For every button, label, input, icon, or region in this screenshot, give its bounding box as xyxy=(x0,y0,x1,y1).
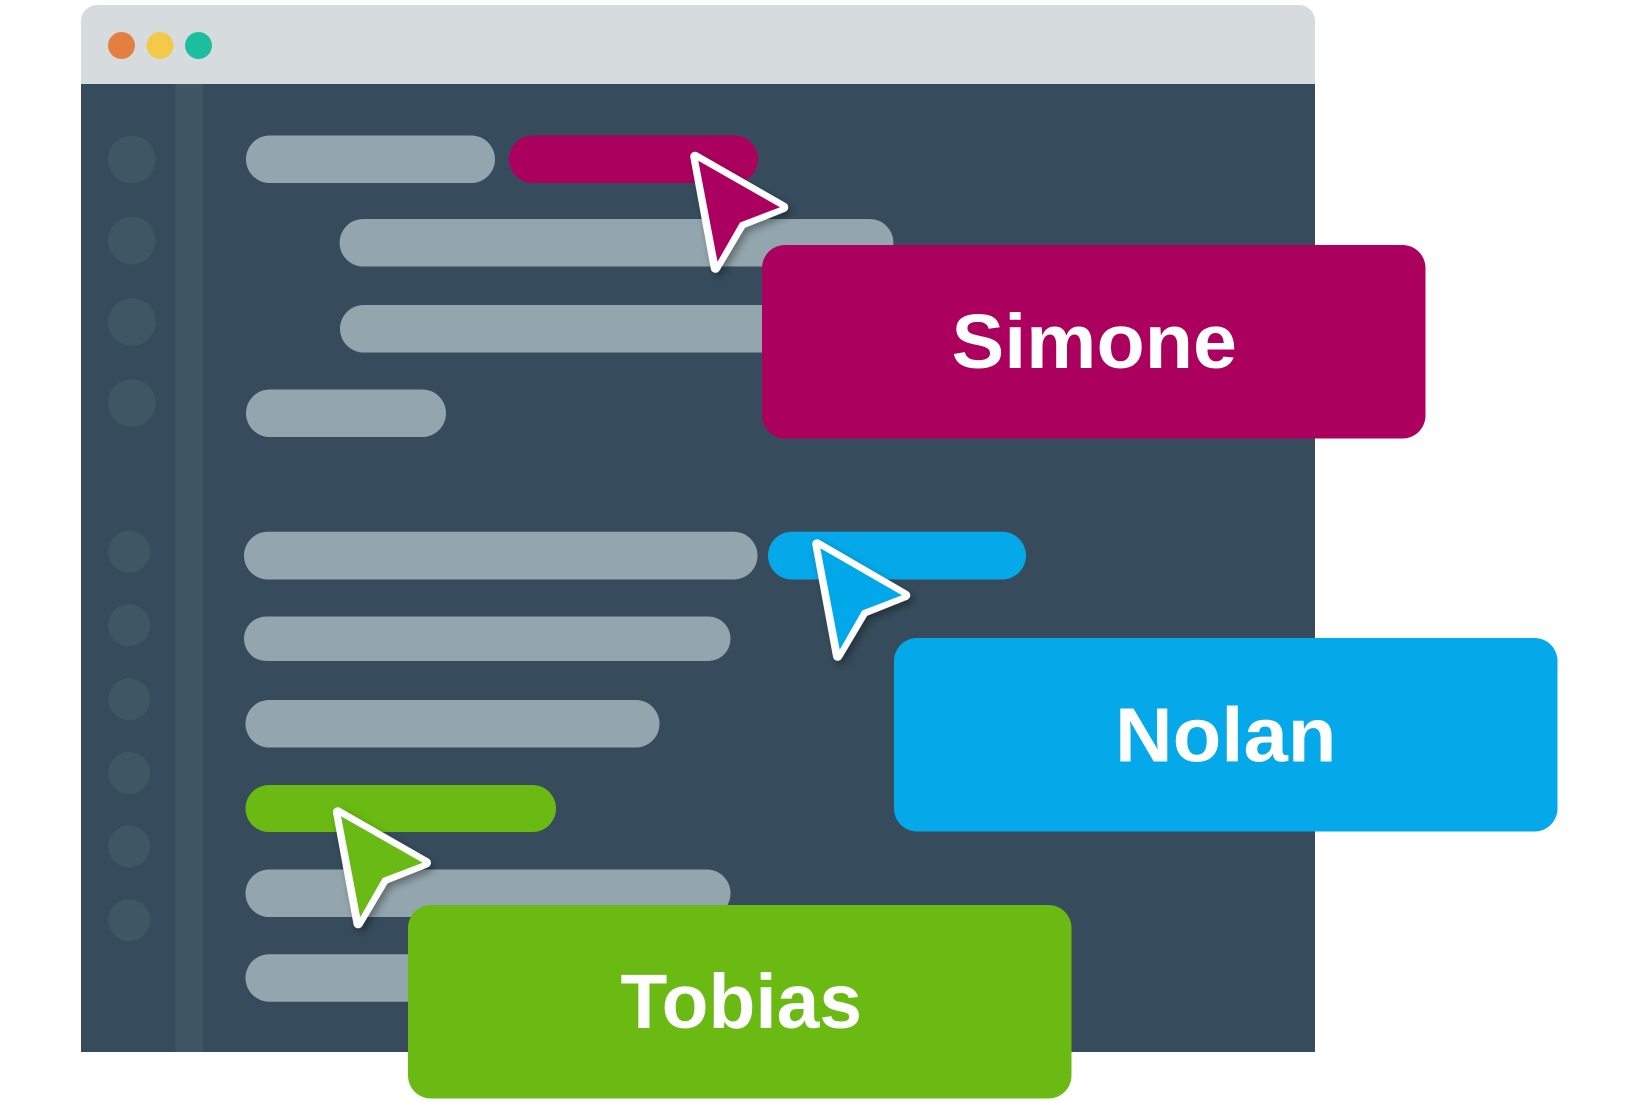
name: Tobias: Tobias xyxy=(620,959,862,1045)
window body xyxy=(81,84,1315,1052)
window title bar xyxy=(81,5,1315,84)
cursor: Tobias xyxy=(338,812,426,924)
cursor: Nolan xyxy=(817,544,906,656)
name: Simone: Simone xyxy=(952,299,1237,385)
highlighted code line: Tobias xyxy=(246,785,556,832)
line gutter markers, upper group xyxy=(108,136,156,427)
name card: Simone xyxy=(762,245,1426,438)
sidebar strip xyxy=(176,84,203,1052)
name card: Tobias xyxy=(408,905,1072,1098)
editor window xyxy=(81,5,1315,1052)
window control buttons xyxy=(108,32,212,59)
name: Nolan: Nolan xyxy=(1115,692,1336,778)
line gutter markers, lower group xyxy=(108,531,150,941)
highlighted code line: Nolan xyxy=(768,532,1026,580)
highlighted code line: Simone xyxy=(509,136,758,183)
code lines, lower group xyxy=(244,532,758,1002)
code lines, upper group xyxy=(246,136,893,437)
name card: Nolan xyxy=(894,638,1558,832)
cursor: Simone xyxy=(695,156,784,268)
